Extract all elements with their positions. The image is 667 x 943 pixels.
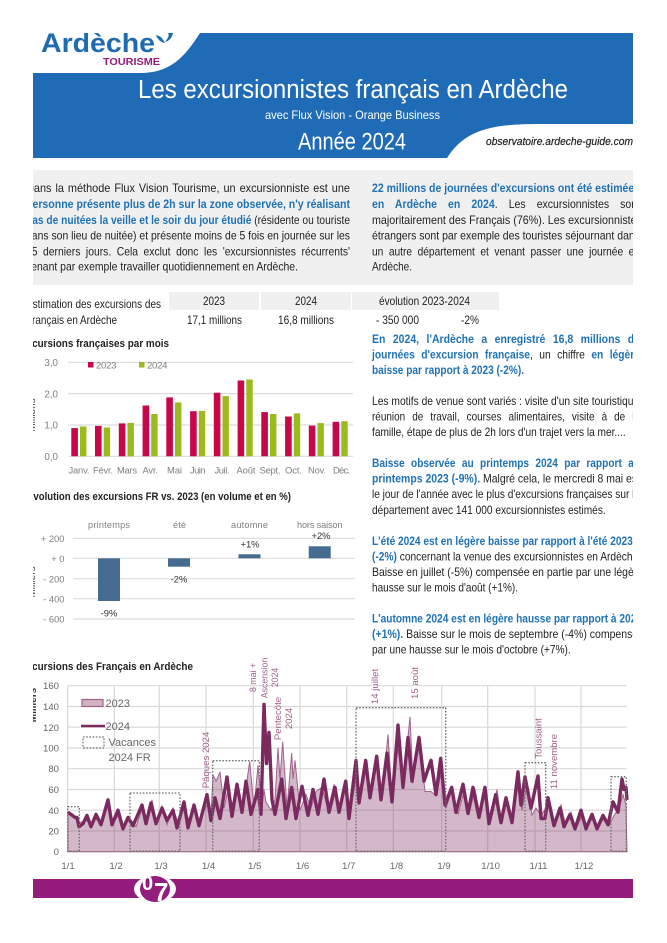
month labels: Juil. — [214, 464, 230, 476]
paragraph: autumn — [372, 612, 644, 657]
percent labels: -9% — [101, 608, 117, 618]
logo: Ardèche Tourisme — [41, 33, 173, 68]
paragraph: summer — [372, 535, 643, 594]
table values: 16,8 millions — [278, 314, 334, 327]
x axis labels: 1/3 — [154, 861, 168, 872]
blue banner shape — [33, 33, 633, 158]
heading: seasonal evolution chart: Evolution des excursions FR vs. 2023 (en volume et en %) — [33, 491, 291, 503]
season labels: hors saison — [297, 520, 342, 530]
panel: analysis text — [371, 333, 633, 657]
table values: -2% — [461, 314, 479, 327]
page number badge — [134, 875, 176, 903]
month labels: Sept. — [260, 464, 280, 476]
table values — [187, 295, 479, 327]
y axis labels: 0,0 — [44, 452, 59, 463]
event annotations: 2024 — [270, 668, 280, 687]
y axis labels: 20 — [48, 826, 59, 838]
paragraph: overview — [371, 333, 640, 377]
x axis labels — [61, 861, 593, 872]
y axis labels: 1,0 — [44, 420, 59, 432]
month labels: Oct. — [285, 464, 302, 476]
event annotations: 15 août — [410, 667, 421, 699]
month labels — [68, 464, 350, 476]
y axis labels: 100 — [43, 744, 59, 754]
season labels — [88, 520, 342, 530]
x axis labels: 1/6 — [296, 861, 309, 872]
table: estimation — [33, 292, 499, 327]
paragraph: summer: hausse sur le mois d'août (+1%). — [372, 582, 518, 594]
month labels: Févr. — [93, 464, 113, 476]
season labels: printemps — [88, 520, 130, 530]
x axis labels: 1/5 — [248, 861, 261, 872]
key figures text: Ardèche. — [372, 260, 412, 274]
month labels: Avr. — [142, 464, 158, 476]
event annotations — [201, 658, 560, 789]
y axis labels: 40 — [48, 806, 59, 817]
event annotations: Ascension — [260, 658, 270, 698]
table values: 2023 — [203, 295, 225, 308]
x axis labels: 1/2 — [109, 861, 123, 872]
x axis labels: 1/7 — [342, 861, 355, 872]
y axis labels: 120 — [43, 723, 59, 734]
panel: 22 millions — [360, 170, 633, 285]
event annotations: 14 juillet — [370, 669, 381, 704]
bar chart: seasonal evolution — [33, 520, 355, 624]
table values: 17,1 millions — [187, 314, 242, 327]
month labels: Nov. — [308, 464, 326, 476]
x axis labels: 1/11 — [530, 861, 547, 872]
row label — [26, 298, 161, 327]
definition text: venant par exemple travailler quotidiennement en Ardèche. — [33, 260, 298, 274]
legend: 2023 — [96, 360, 116, 372]
paragraph: overview: baisse par rapport à 2023 (-2%). — [372, 364, 524, 377]
header banner — [33, 33, 633, 158]
legend — [88, 360, 168, 372]
line chart: daily excursions — [33, 658, 629, 872]
logo: Ardèche Tourisme: TOURISME — [103, 57, 160, 68]
legend: 2024 — [147, 360, 168, 372]
table values: 2024 — [295, 295, 317, 308]
legend: 2024 FR — [108, 752, 151, 764]
bar chart: monthly excursions — [33, 358, 353, 476]
event annotations: 2024 — [284, 707, 295, 729]
percent labels — [101, 530, 331, 618]
paragraph: autumn: par une hausse sur le mois d'octobre (+7%). — [372, 644, 571, 657]
y axis labels — [44, 358, 59, 463]
y axis labels — [41, 533, 64, 624]
paragraph: spring: département avec 141 000 excursionnistes estimés. — [372, 504, 606, 517]
x axis labels: 1/4 — [202, 861, 216, 872]
panel: definition — [33, 170, 360, 285]
y axis labels: 140 — [43, 702, 59, 713]
bars 2023 — [71, 380, 339, 456]
event annotations: 8 mai + — [248, 663, 258, 692]
y axis labels — [43, 681, 59, 858]
area 2023 — [68, 717, 627, 852]
month labels: Mai — [167, 464, 182, 476]
event annotations: Pentecôte — [273, 697, 284, 740]
y axis labels: 2,0 — [44, 390, 59, 400]
y axis labels: - 600 — [43, 614, 64, 624]
y axis labels: + 200 — [41, 533, 64, 544]
x axis labels: 1/9 — [437, 861, 451, 872]
bars 2024 — [80, 380, 348, 456]
event annotations: Pâques 2024 — [201, 731, 212, 788]
month labels: Mars — [117, 464, 137, 476]
website url: observatoire.ardeche-guide.com — [486, 136, 633, 148]
y axis labels: 0 — [54, 847, 59, 858]
bars — [98, 546, 331, 601]
percent labels: +2% — [311, 530, 331, 541]
month labels: Déc. — [333, 464, 350, 476]
percent labels: -2% — [171, 574, 187, 584]
footer bar — [33, 879, 633, 898]
x axis labels: 1/10 — [481, 861, 500, 872]
definition text — [26, 182, 350, 274]
month labels: Janv. — [68, 464, 90, 476]
paragraph: motives — [372, 395, 642, 439]
paragraph: spring — [372, 457, 641, 517]
y axis labels: - 200 — [43, 574, 64, 584]
y axis labels: 60 — [48, 785, 59, 796]
legend — [81, 698, 156, 764]
legend: 2024 — [106, 721, 130, 733]
x axis labels: 1/12 — [575, 861, 593, 872]
year heading: Année 2024 — [298, 128, 406, 156]
x axis labels: 1/1 — [61, 861, 75, 872]
month labels: Juin — [190, 464, 206, 476]
table values: évolution 2023-2024 — [379, 295, 470, 308]
school holiday boxes — [68, 708, 626, 851]
y axis labels: 3,0 — [44, 358, 59, 369]
y axis labels: 80 — [48, 764, 59, 775]
key figures text — [372, 182, 642, 274]
legend: 2023 — [106, 698, 130, 710]
x axis labels: 1/8 — [390, 861, 403, 872]
title: Les excursionnistes français en Ardèche — [138, 76, 568, 104]
event annotations: Toussaint — [534, 718, 544, 759]
season labels: été — [173, 520, 186, 530]
event annotations: 11 novembre — [549, 734, 560, 789]
subtitle: avec Flux Vision - Orange Business — [265, 108, 440, 122]
line 2024 — [68, 704, 627, 829]
season labels: automne — [231, 520, 268, 530]
month labels: Août — [236, 464, 256, 476]
y axis labels: 160 — [43, 681, 59, 692]
y axis labels: + 0 — [51, 553, 64, 564]
legend: Vacances — [108, 737, 156, 749]
y axis labels: - 400 — [43, 594, 64, 604]
percent labels: +1% — [240, 538, 260, 550]
table values: - 350 000 — [376, 314, 419, 327]
